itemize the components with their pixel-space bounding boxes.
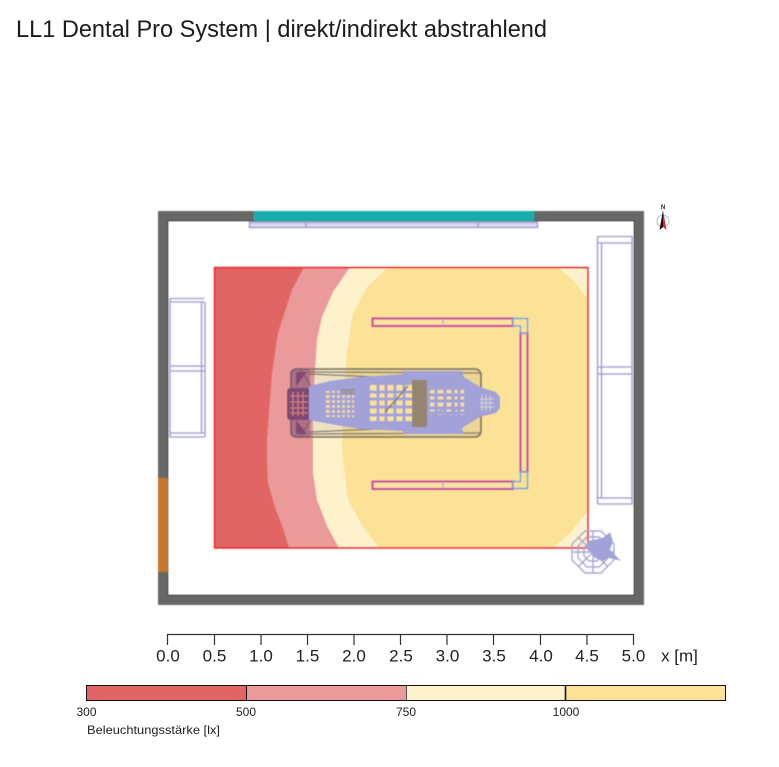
top cabinet: [250, 222, 538, 228]
chair headrest grid: [480, 395, 494, 411]
north arrow: [657, 205, 669, 230]
colour bar values: 750: [396, 705, 416, 719]
scale labels: 1.0: [249, 646, 273, 666]
chair body: [309, 374, 500, 431]
colour bar caption: Beleuchtungsstärke [lx]: [87, 723, 220, 737]
luminaire: magenta and blue frame: [372, 318, 528, 489]
scale axis: [156, 634, 698, 666]
colour bar values: 300: [76, 705, 97, 719]
scale labels: x [m]: [661, 646, 698, 666]
plant: [572, 531, 621, 573]
chair side rails: [403, 371, 464, 434]
plant pot: [572, 531, 614, 573]
scale labels: 3.0: [436, 646, 459, 666]
scale labels: 0.5: [203, 646, 226, 666]
scale labels: 4.5: [575, 646, 599, 666]
contour: corner top right: [558, 268, 587, 298]
scale labels: 1.5: [296, 646, 319, 666]
colour bar values: 1000: [553, 705, 580, 719]
contour: corner bottom right: [553, 512, 587, 548]
scale labels: 5.0: [622, 646, 645, 666]
right cabinet: [598, 236, 632, 504]
legend: illuminance colour bar: [76, 686, 726, 737]
plant leaves: [586, 532, 621, 561]
room walls: [158, 211, 644, 605]
window: teal: [254, 211, 534, 221]
door: orange: [158, 478, 168, 572]
left cabinet: [170, 298, 205, 437]
illuminance map: calculation area: [214, 267, 588, 548]
chair left end: [287, 368, 310, 438]
scale labels: 2.0: [342, 646, 366, 666]
chair brown block: [412, 380, 427, 427]
dental chair: [287, 368, 500, 438]
scale labels: [156, 646, 698, 666]
colour bar values: 500: [236, 705, 256, 719]
colour bar values: [76, 705, 580, 719]
contour: 500-750 lx: [214, 267, 350, 548]
colour bar: [86, 686, 726, 700]
scale labels: 0.0: [156, 646, 180, 666]
north arrow: N: [661, 205, 665, 211]
scale labels: 4.0: [529, 646, 553, 666]
scale labels: 2.5: [389, 646, 413, 666]
chair seat grid right: [429, 388, 465, 417]
chair frame: [291, 369, 481, 437]
contour: 750-1000 lx: [214, 267, 388, 548]
contour: 300-500 lx: [214, 267, 304, 548]
chair seat grid left: [325, 388, 355, 419]
title: LL1 Dental Pro System | direkt/indirekt abstrahlend: [16, 16, 547, 43]
panel: floor plan: [158, 211, 644, 605]
calculation area border: [214, 268, 588, 548]
scale labels: 3.5: [482, 646, 506, 666]
chair seat grid middle: [368, 384, 412, 422]
